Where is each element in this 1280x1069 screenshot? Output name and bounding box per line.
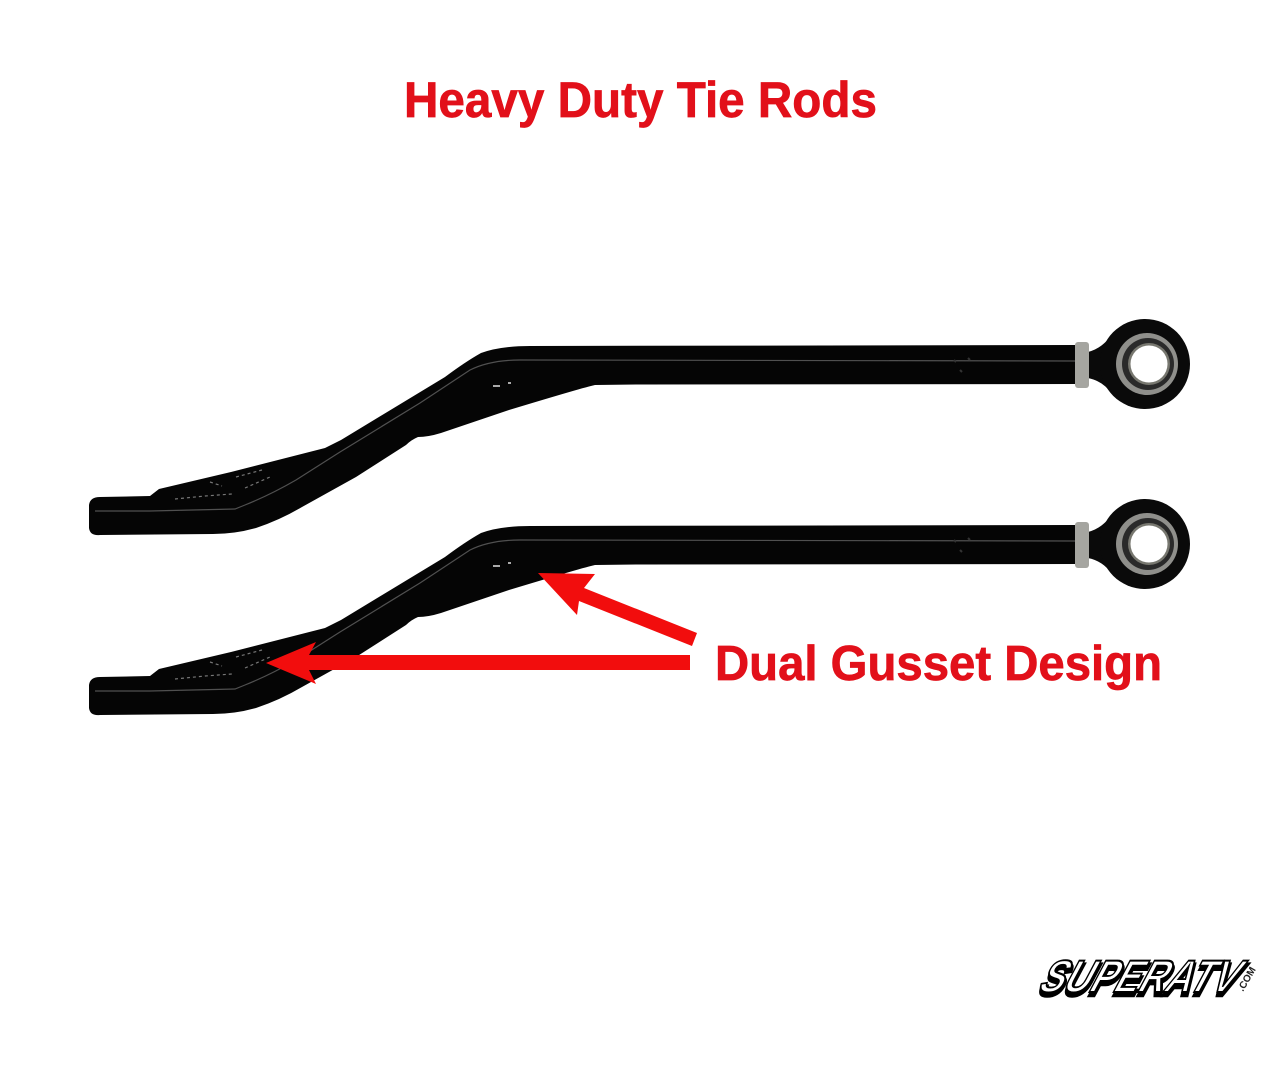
logo: SuperATV.com: .COM [1236, 965, 1259, 994]
title: Heavy Duty Tie Rods [404, 72, 877, 128]
tie rod: top [89, 319, 1190, 535]
logo: SuperATV.com: SUPERATV [1031, 951, 1254, 1002]
arrow: horizontal pointing to lower gusset [266, 642, 690, 684]
logo: SuperATV.com: SUPERATV [1031, 954, 1254, 1006]
tie rod: bottom [89, 499, 1190, 715]
arrow: diagonal pointing to upper gusset [538, 573, 697, 646]
callout label: Dual Gusset Design [715, 637, 1162, 691]
